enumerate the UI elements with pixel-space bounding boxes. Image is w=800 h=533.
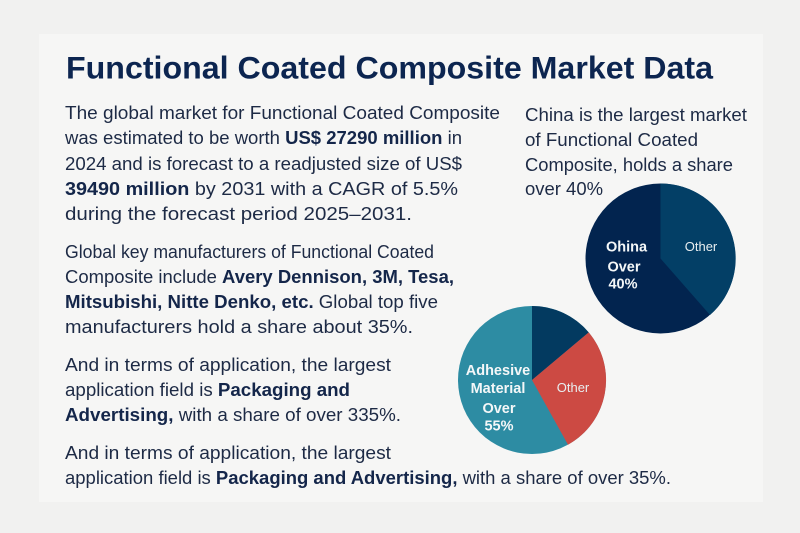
pie chart: adhesive material: Material <box>471 381 525 397</box>
pie chart: adhesive material: Over <box>482 401 516 417</box>
pie chart: adhesive material: Adhesive <box>466 363 530 379</box>
text block: manufacturers <box>65 241 454 337</box>
text block: market size: The global market for Functional Coated Composite <box>65 102 500 123</box>
text block: application two: application field is Packaging and Advertising, with a share of over 35%. <box>65 467 671 488</box>
text block: China share: Composite, holds a share <box>525 154 733 175</box>
pie chart: China: Other <box>685 239 718 254</box>
text block: application two: And in terms of application, the largest <box>65 442 391 463</box>
title: Functional Coated Composite Market Data <box>66 50 713 86</box>
text block: application one: Advertising, with a share of over 335%. <box>65 404 401 425</box>
pie chart: adhesive material: 55% <box>484 418 514 434</box>
text block: market size: was estimated to be worth US$ 27290 million in <box>64 127 462 148</box>
text block: China share: over 40% <box>525 178 603 199</box>
text block: application one <box>65 354 401 425</box>
text block: market size: 2024 and is forecast to a readjusted size of US$ <box>65 153 462 174</box>
text block: China share: of Functional Coated <box>525 129 698 150</box>
pie chart: China <box>586 183 736 334</box>
text block: application one: application field is Packaging and <box>65 379 350 400</box>
text block: market size <box>64 102 500 224</box>
text block: manufacturers: Global key manufacturers of Functional Coated <box>65 241 434 262</box>
text block: China share <box>525 104 747 199</box>
pie chart: China: Ohina <box>606 240 648 256</box>
text block: manufacturers: manufacturers hold a share about 35%. <box>65 316 413 337</box>
panel: main card <box>39 34 763 502</box>
pie chart: adhesive material <box>458 306 606 454</box>
text block: application two <box>65 442 671 488</box>
pie chart: adhesive material: Other <box>557 380 590 395</box>
text block: China share: China is the largest market <box>525 104 747 125</box>
pie chart: China: 40% <box>608 276 638 292</box>
text block: application one: And in terms of application, the largest <box>65 354 391 375</box>
pie chart: China: Over <box>607 260 641 276</box>
text block: manufacturers: Composite include Avery Dennison, 3M, Tesa, <box>65 266 454 287</box>
text block: manufacturers: Mitsubishi, Nitte Denko, etc. Global top five <box>65 291 438 312</box>
text block: market size: during the forecast period 2025–2031. <box>65 203 412 224</box>
text block: market size: 39490 million by 2031 with a CAGR of 5.5% <box>65 178 458 199</box>
